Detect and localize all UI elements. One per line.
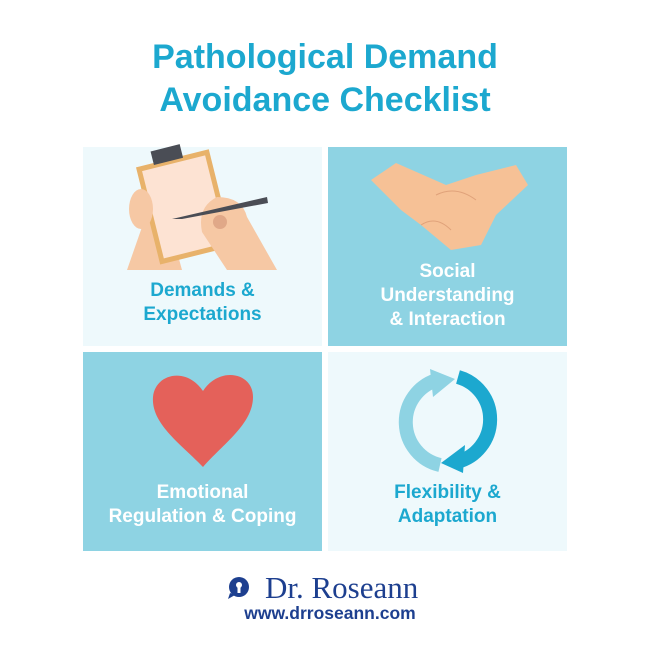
panel: demands: [83, 147, 322, 346]
label: [394, 482, 501, 527]
label: Flexibility &: [394, 482, 501, 503]
icon: heart: [152, 375, 253, 467]
panel: flexibility: [328, 352, 567, 551]
title: Avoidance Checklist: [159, 81, 491, 119]
label: [143, 280, 262, 325]
label: Adaptation: [398, 506, 497, 527]
label: [109, 482, 296, 527]
label: Expectations: [143, 304, 262, 325]
label: Emotional: [157, 482, 248, 503]
label: Demands &: [150, 280, 255, 301]
url: www.drroseann.com: [244, 603, 416, 623]
label: & Interaction: [389, 309, 506, 330]
icon: logo bubble: [228, 577, 249, 599]
icon: clipboard: [127, 144, 277, 270]
brand name: Dr. Roseann: [265, 570, 418, 605]
panel: emotional: [83, 352, 322, 551]
logo: [228, 570, 418, 623]
title: Pathological Demand: [152, 38, 498, 76]
label: Social: [420, 261, 475, 282]
icon: cycle arrows: [398, 369, 498, 473]
label: [380, 261, 515, 330]
label: Understanding: [380, 285, 515, 306]
title: [152, 38, 498, 119]
panel: social: [328, 147, 567, 346]
label: Regulation & Coping: [109, 506, 296, 527]
icon: handshake: [371, 163, 528, 250]
